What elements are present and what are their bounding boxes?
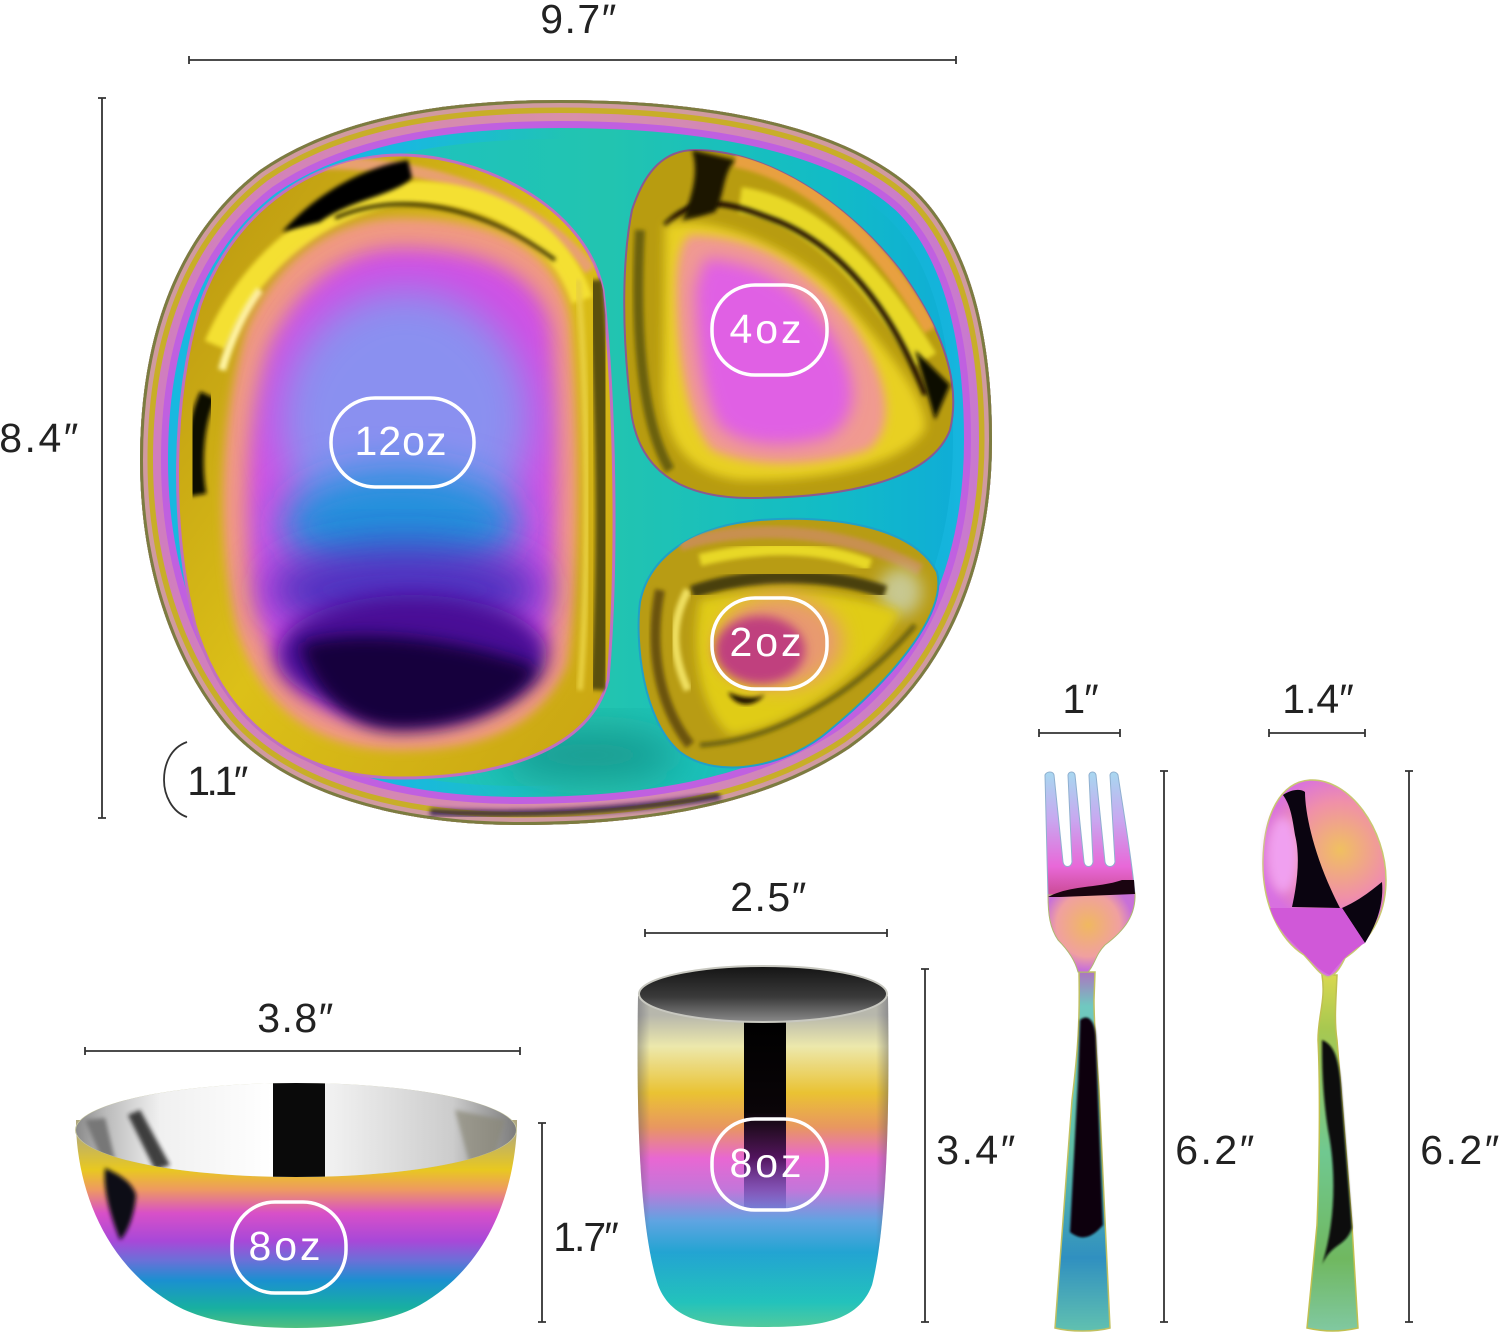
capacity label: cup 8oz: [712, 1119, 827, 1210]
capacity label: 12oz: [331, 398, 474, 487]
fork head: [1045, 772, 1135, 897]
panel: divided plate: [130, 95, 1000, 835]
dimension: plate depth: 1.1″: [187, 758, 248, 804]
dimension: plate height: [0, 98, 106, 818]
cup shading: [638, 996, 888, 1327]
dimension: cup width: 2.5″: [730, 874, 808, 920]
capacity label: 4oz: [712, 285, 827, 375]
dimension: bowl width: 3.8″: [257, 995, 335, 1041]
spoon left highlight: [1267, 817, 1299, 893]
panel: cup: [638, 966, 888, 1327]
capacity label: 2oz: 2oz: [729, 619, 805, 665]
dimension: spoon width: 1.4″: [1282, 676, 1354, 722]
fork handle: [1055, 972, 1110, 1331]
capacity label: 4oz: 4oz: [729, 306, 805, 352]
dimension: cup height: [921, 969, 1018, 1322]
dimension: bowl height: 1.7″: [553, 1214, 618, 1260]
12oz compartment: [178, 155, 614, 778]
dimension: fork height: [1160, 771, 1257, 1322]
capacity label: 2oz: [712, 598, 827, 689]
bowl body: [70, 1120, 525, 1332]
spoon dark reflection: [1283, 790, 1340, 908]
spoon handle: [1307, 975, 1358, 1331]
cup black reflection: [744, 1022, 786, 1210]
bowl interior: [70, 1080, 520, 1180]
spoon handle dark reflection: [1322, 1040, 1352, 1265]
spoon right dark reflection: [1342, 882, 1382, 943]
panel: bowl: [70, 1080, 525, 1332]
dimension: cup height: 3.4″: [936, 1127, 1018, 1173]
spoon bowl: [1263, 780, 1386, 977]
capacity label: bowl 8oz: [232, 1202, 346, 1293]
dimension: fork height: 6.2″: [1175, 1127, 1257, 1173]
spoon lower reflection: [1270, 908, 1365, 975]
dimension: spoon width: [1269, 676, 1365, 737]
dimension: fork width: 1″: [1062, 676, 1098, 722]
dimension: cup width: [645, 874, 887, 937]
dimension: spoon height: [1405, 771, 1500, 1322]
4oz compartment: [624, 150, 953, 498]
dimension: plate height: 8.4″: [0, 415, 81, 461]
capacity label: bowl 8oz: 8oz: [248, 1223, 324, 1269]
dimension: plate depth: [164, 742, 248, 817]
capacity label: cup 8oz: 8oz: [729, 1140, 805, 1186]
dimension: plate width: [189, 0, 956, 64]
cup body: [638, 996, 888, 1327]
panel: spoon: [1263, 780, 1386, 1331]
dimension: fork width: [1039, 676, 1120, 737]
dimension: spoon height: 6.2″: [1420, 1127, 1500, 1173]
fork black band: [1048, 880, 1135, 897]
plate body and rim: [130, 95, 1000, 835]
fork handle dark reflection: [1070, 1018, 1103, 1237]
fork lower head: [1048, 893, 1135, 972]
dimension: bowl width: [85, 995, 520, 1055]
dimension: bowl height: [538, 1123, 618, 1322]
panel: fork: [1045, 772, 1135, 1331]
capacity label: 12oz: 12oz: [355, 418, 447, 464]
cup rim: [639, 966, 887, 1022]
2oz compartment: [639, 519, 938, 767]
